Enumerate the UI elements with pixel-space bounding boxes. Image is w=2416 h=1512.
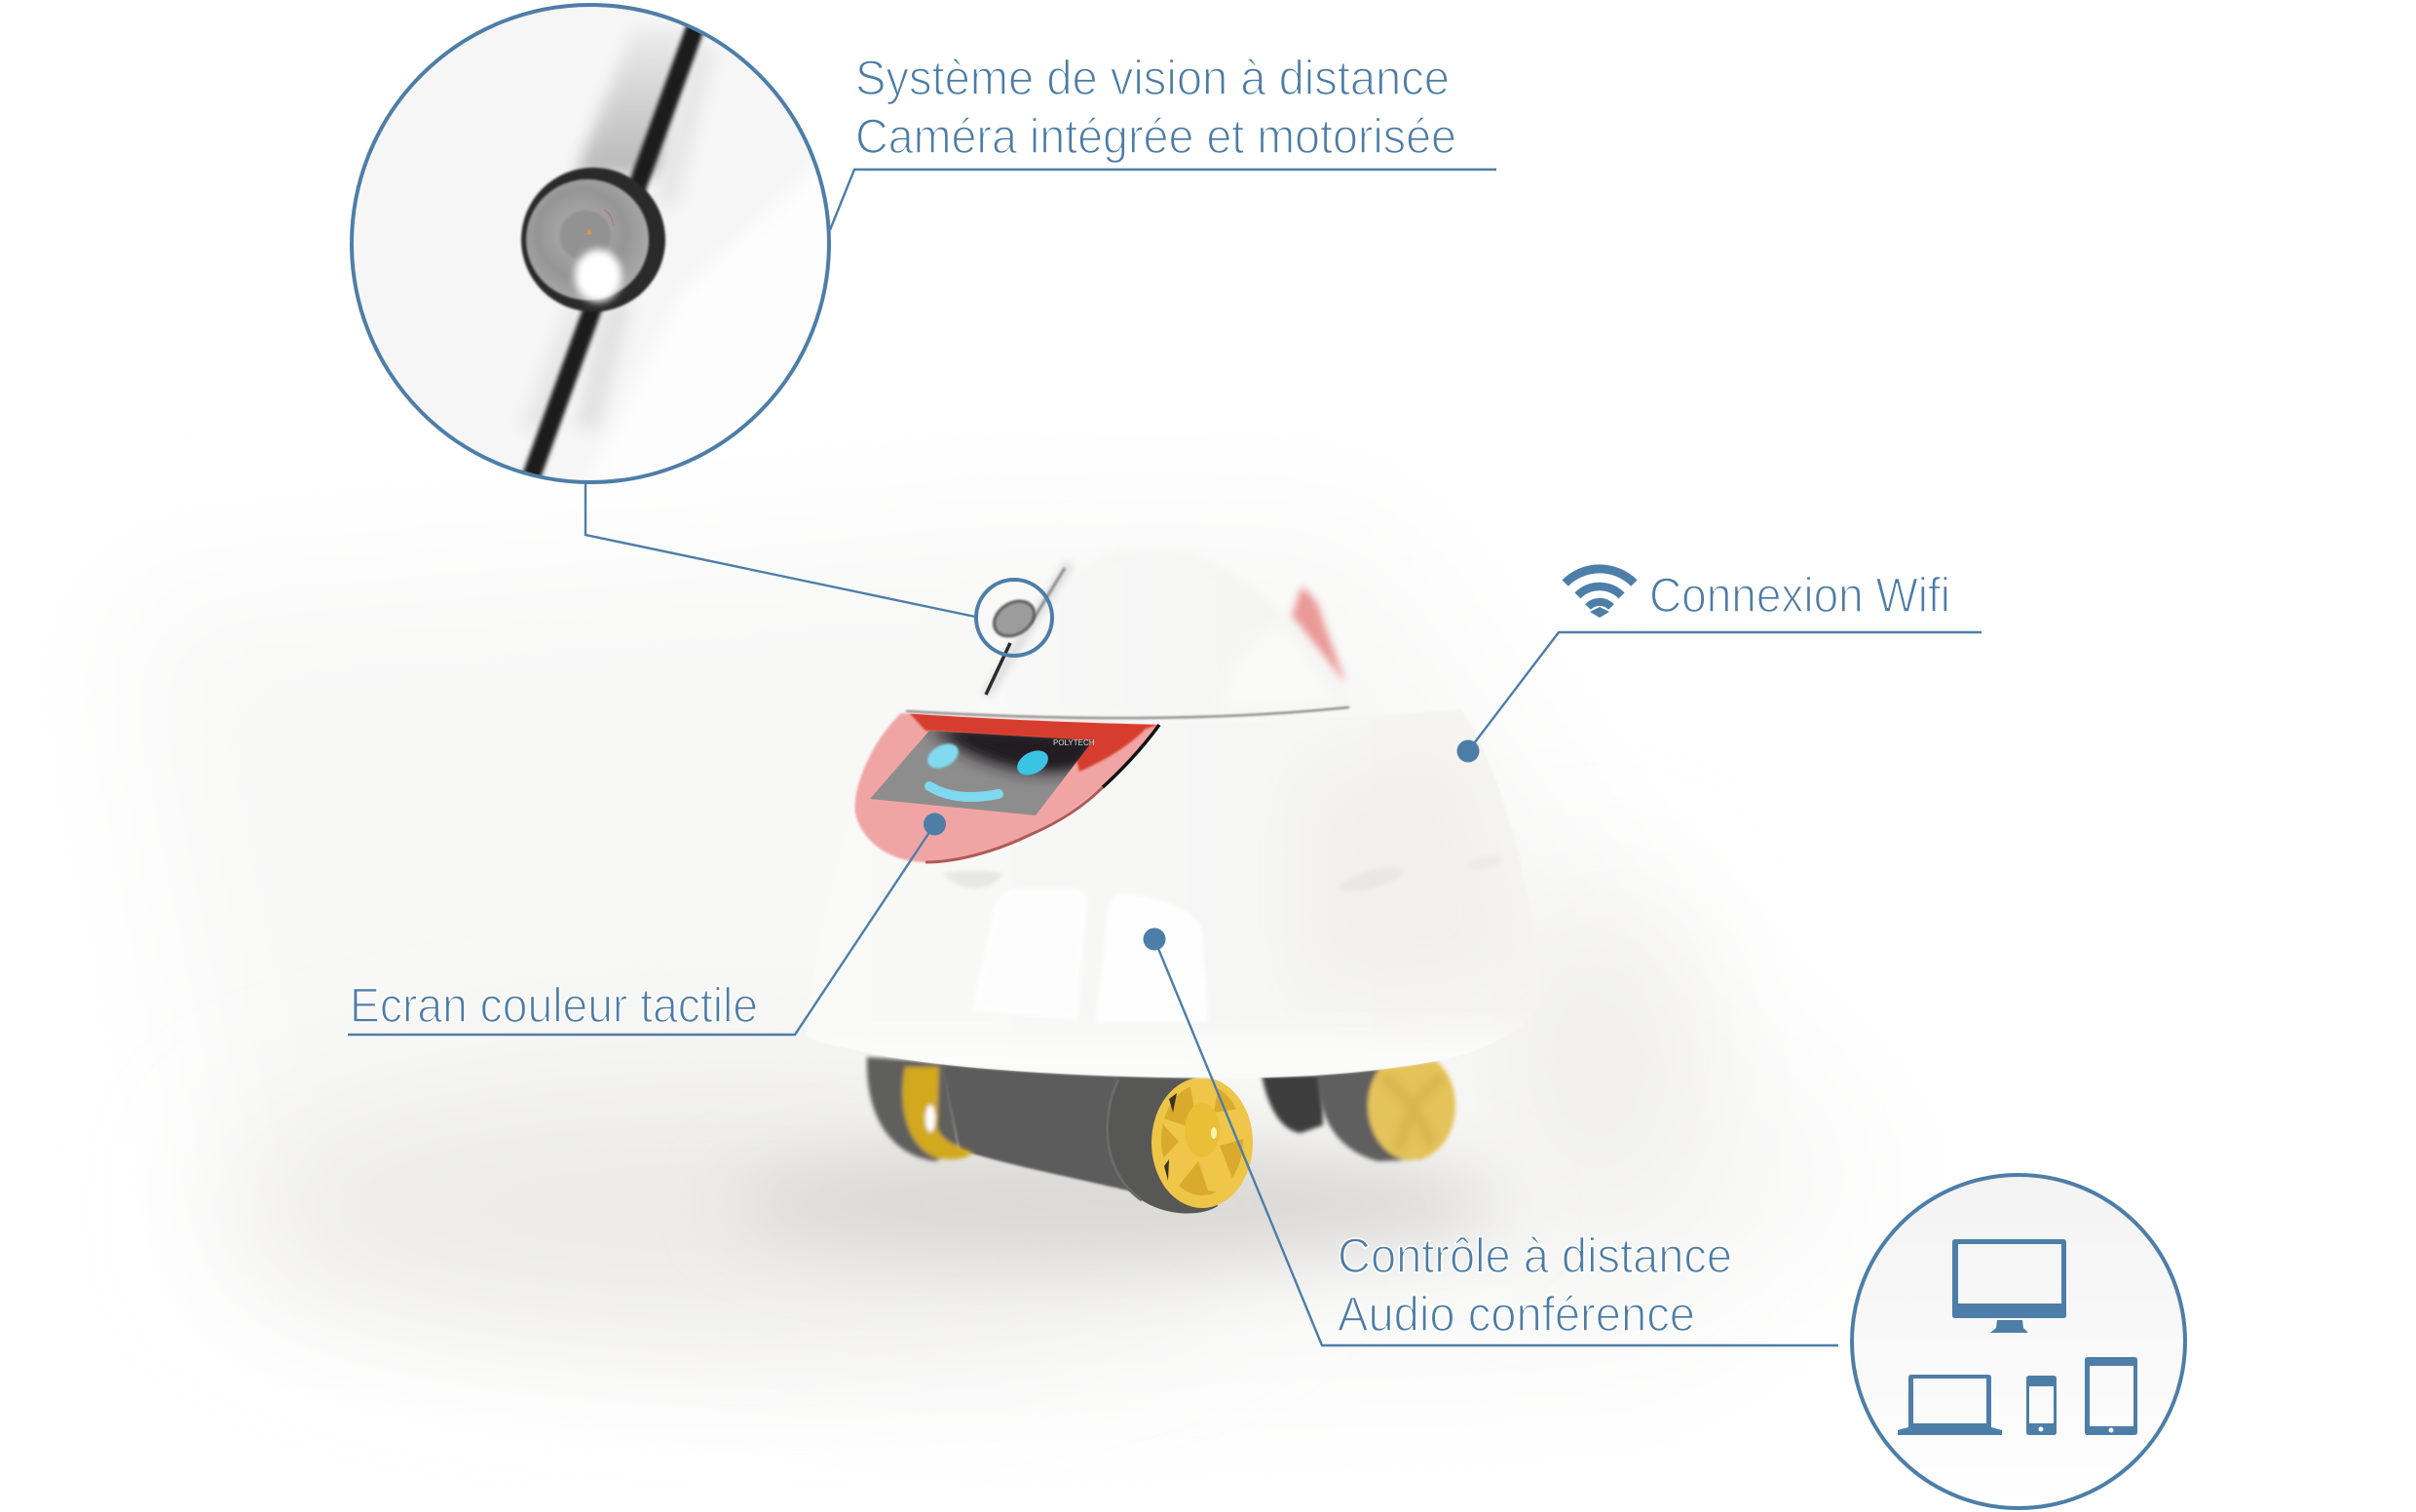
leader line: wifi	[1468, 632, 1982, 751]
grey halo around the cable	[575, 29, 687, 175]
vent left	[943, 871, 1003, 888]
icon: tablet	[2085, 1357, 2137, 1435]
leader line: vision	[830, 170, 1496, 230]
panel: devices circle	[1852, 1175, 2185, 1508]
camera slot on the head	[986, 563, 1070, 696]
eye left	[924, 738, 963, 774]
label: remote control text: Audio conférence	[1338, 1287, 1695, 1342]
soft shading on the shell	[799, 740, 1559, 1086]
left window reflection	[972, 888, 1087, 1020]
axle block	[940, 1057, 1140, 1193]
leader line: touch screen	[348, 824, 935, 1035]
right wheel	[1317, 1051, 1455, 1161]
label: remote control text	[1338, 1228, 1732, 1342]
left wheel	[867, 1057, 974, 1161]
rim shadow line	[906, 707, 1349, 718]
dot: wifi	[1457, 740, 1479, 762]
brand mark: POLYTECH	[1053, 738, 1095, 747]
eye right	[1013, 745, 1052, 780]
vent centre	[1337, 863, 1405, 896]
label: remote control text: Contrôle à distance	[1338, 1228, 1732, 1283]
robot lower body shell	[857, 711, 1510, 1079]
front wheel	[1105, 1077, 1259, 1214]
label: vision system text: Caméra intégrée et motorisée	[855, 109, 1456, 164]
robot	[799, 548, 1559, 1214]
cable	[531, 24, 697, 477]
pink panel	[855, 713, 1159, 862]
small camera ring	[976, 580, 1052, 656]
dot: touch screen	[924, 813, 946, 836]
robot head dome	[906, 548, 1350, 718]
label: wifi text: Connexion Wifi	[1649, 568, 1950, 623]
callout: vision system	[830, 51, 1496, 230]
dot: remote control	[1144, 927, 1165, 951]
dark red top band	[906, 709, 1164, 772]
vent right	[1466, 853, 1503, 873]
robot face panel	[855, 709, 1164, 862]
icon: wifi	[1566, 569, 1634, 618]
dark edge of the panel	[925, 725, 1159, 862]
icon: desktop monitor	[1952, 1239, 2066, 1333]
callout: touch screen	[348, 813, 946, 1035]
icon: smartphone	[2026, 1376, 2057, 1435]
icon: laptop	[1898, 1375, 2002, 1435]
leader line: camera circle to robot camera	[585, 482, 1052, 656]
leader line: remote control	[1154, 939, 1838, 1345]
lower band highlight	[880, 1054, 1441, 1077]
lens	[521, 168, 665, 312]
smile	[929, 786, 999, 797]
label: vision system text	[855, 51, 1456, 164]
label: vision system text: Système de vision à distance	[855, 51, 1450, 105]
red slit at the back	[1292, 586, 1345, 684]
label: touch screen text: Ecran couleur tactile	[350, 978, 758, 1033]
callout: wifi	[1457, 568, 1982, 762]
callout: remote control	[1144, 927, 1838, 1345]
rear dark wheel	[1262, 1075, 1323, 1133]
right window reflection	[1096, 894, 1208, 1021]
screen	[870, 726, 1101, 815]
callout: camera zoom circle	[352, 5, 838, 487]
robot wheels and axle	[867, 1051, 1455, 1214]
